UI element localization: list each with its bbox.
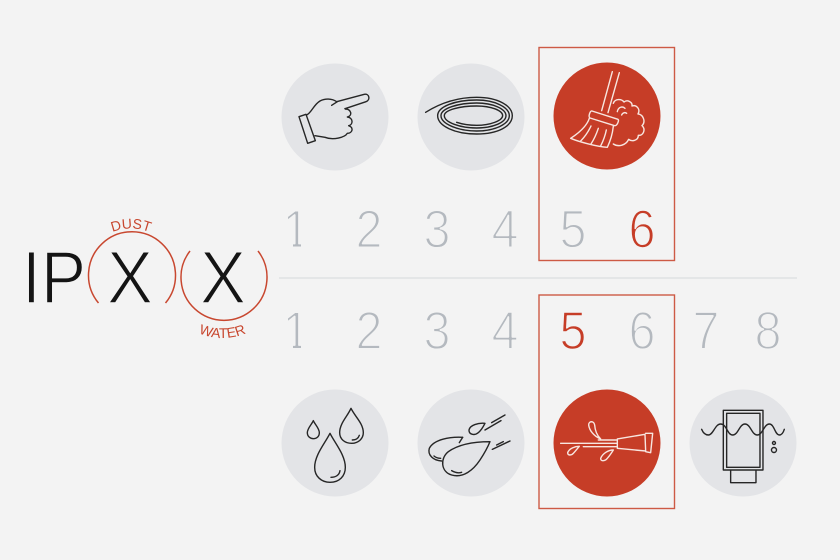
first X: X (107, 236, 153, 319)
water label: WATER (201, 324, 246, 338)
dust rating numbers: 6 (628, 200, 656, 260)
icon: broom sweeping dust (554, 62, 660, 170)
dust label: DUST (110, 218, 152, 232)
water rating numbers: 2 (356, 301, 382, 361)
water rating numbers: 4 (492, 301, 518, 361)
dust rating numbers: 5 (560, 200, 586, 260)
water rating numbers: 7 (692, 301, 720, 361)
water rating numbers: 1 (282, 301, 310, 361)
icon: immersed device (690, 390, 796, 496)
infographic (29, 46, 797, 510)
water rating numbers: 5 (560, 301, 586, 361)
water rating numbers: 3 (424, 301, 450, 361)
water arc (181, 251, 267, 320)
icon: water drops (282, 390, 388, 496)
icon: driving water drops (418, 390, 524, 496)
icon: water jet nozzle (554, 390, 660, 496)
second X: X (200, 236, 246, 319)
water rating numbers: 8 (754, 301, 782, 361)
icon: pointing hand (282, 64, 388, 170)
dust rating numbers (288, 210, 653, 248)
IP letters: IP (22, 236, 86, 319)
water rating numbers: 6 (628, 301, 656, 361)
highlight box: water 5 (539, 295, 674, 508)
dust rating numbers: 3 (424, 200, 450, 260)
highlight box: dust 6 (539, 48, 674, 260)
water rating numbers (288, 312, 778, 349)
IPXX logo (22, 218, 268, 338)
dust rating numbers: 2 (356, 200, 382, 260)
dust rating numbers: 4 (492, 200, 518, 260)
dust arc (88, 232, 176, 303)
icon: coiled wire (418, 64, 524, 170)
dust rating numbers: 1 (282, 200, 310, 260)
